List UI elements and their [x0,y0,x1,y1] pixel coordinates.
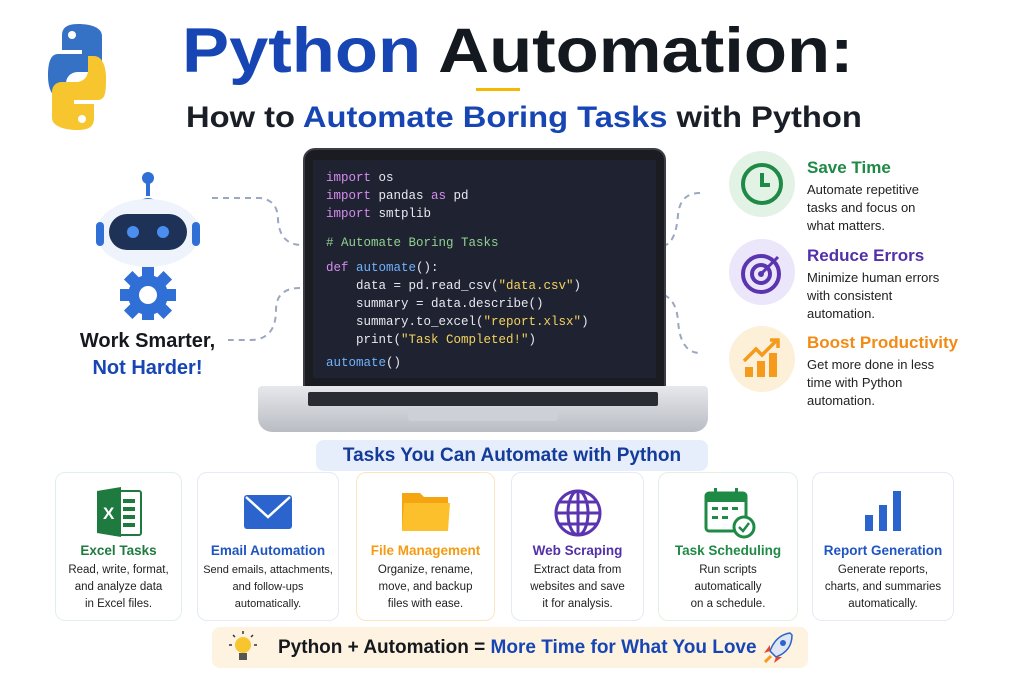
card: email: automatically. [235,598,301,610]
card: scheduling: Task Scheduling [675,543,781,558]
card: web: Web Scraping [533,543,622,558]
benefit: save time: Automate repetitive [807,182,919,197]
code block: import pandas as pd [326,189,469,203]
card: email: Email Automation [211,543,325,558]
card: files: move, and backup [378,581,472,593]
icon: rocket [764,632,793,663]
card: scheduling [658,472,798,621]
code block: automate() [326,356,401,370]
robot [96,172,200,320]
card: web: Extract data from [534,564,621,576]
card: scheduling: automatically [694,581,762,593]
benefit: save time: Save Time [807,158,891,177]
bottom banner [212,627,808,668]
laptop [258,148,708,432]
code block: summary = data.describe() [356,297,544,311]
benefit: boost productivity: time with Python [807,375,902,390]
section heading: Tasks You Can Automate with Python [343,445,681,466]
card: email: Send emails, attachments, [203,564,333,576]
card: reports: Report Generation [824,543,942,558]
card: reports: charts, and summaries [825,581,941,593]
code block: print("Task Completed!") [356,333,536,347]
card: files: files with ease. [388,598,463,610]
card: excel: X [102,504,114,523]
benefit: save time: tasks and focus on [807,200,915,215]
benefit: boost productivity: automation. [807,393,875,408]
card: excel: Read, write, format, [68,564,169,576]
benefit: save time [729,151,919,233]
benefit: save time: what matters. [807,218,885,233]
benefit: reduce errors: Reduce Errors [807,246,924,265]
benefit: boost productivity: Boost Productivity [807,333,958,352]
code block [326,171,589,370]
dashed connectors [212,197,300,341]
card: scheduling: on a schedule. [691,598,765,610]
benefit: boost productivity [729,326,958,408]
code block: data = pd.read_csv("data.csv") [356,279,581,293]
benefit: reduce errors: with consistent [807,288,892,303]
card: reports: Generate reports, [838,564,928,576]
benefit: reduce errors: automation. [807,306,875,321]
robot caption [80,330,215,379]
code block: summary.to_excel("report.xlsx") [356,315,589,329]
robot caption: Work Smarter, [80,330,215,352]
robot caption: Not Harder! [92,357,202,379]
card: scheduling: Run scripts [699,564,757,576]
card: files [356,472,495,621]
code block: def automate(): [326,261,439,275]
subtitle: How to Automate Boring Tasks with Python [186,101,862,134]
benefit: reduce errors [729,239,939,321]
card: excel: in Excel files. [85,598,152,610]
card: excel: Excel Tasks [80,543,157,558]
card: web: it for analysis. [542,598,613,610]
code block: import os [326,171,394,185]
bottom banner: Python + Automation = More Time for What You Love [278,637,757,658]
card: web [511,472,644,621]
benefit: reduce errors: Minimize human errors [807,270,939,285]
code block: # Automate Boring Tasks [326,236,499,250]
card: excel [55,472,182,621]
section heading [316,440,708,471]
title: Python Automation: [182,16,854,86]
card: reports: automatically. [848,598,918,610]
benefit: boost productivity: Get more done in less [807,357,934,372]
card: excel: and analyze data [75,581,162,593]
card: reports [812,472,954,621]
card: files: File Management [371,543,480,558]
card: email [197,472,339,621]
icon: bulb [229,631,257,660]
card: email: and follow-ups [233,581,303,593]
card: files: Organize, rename, [378,564,473,576]
python logo [48,24,106,130]
code block: import smtplib [326,207,431,221]
card: web: websites and save [530,581,625,593]
